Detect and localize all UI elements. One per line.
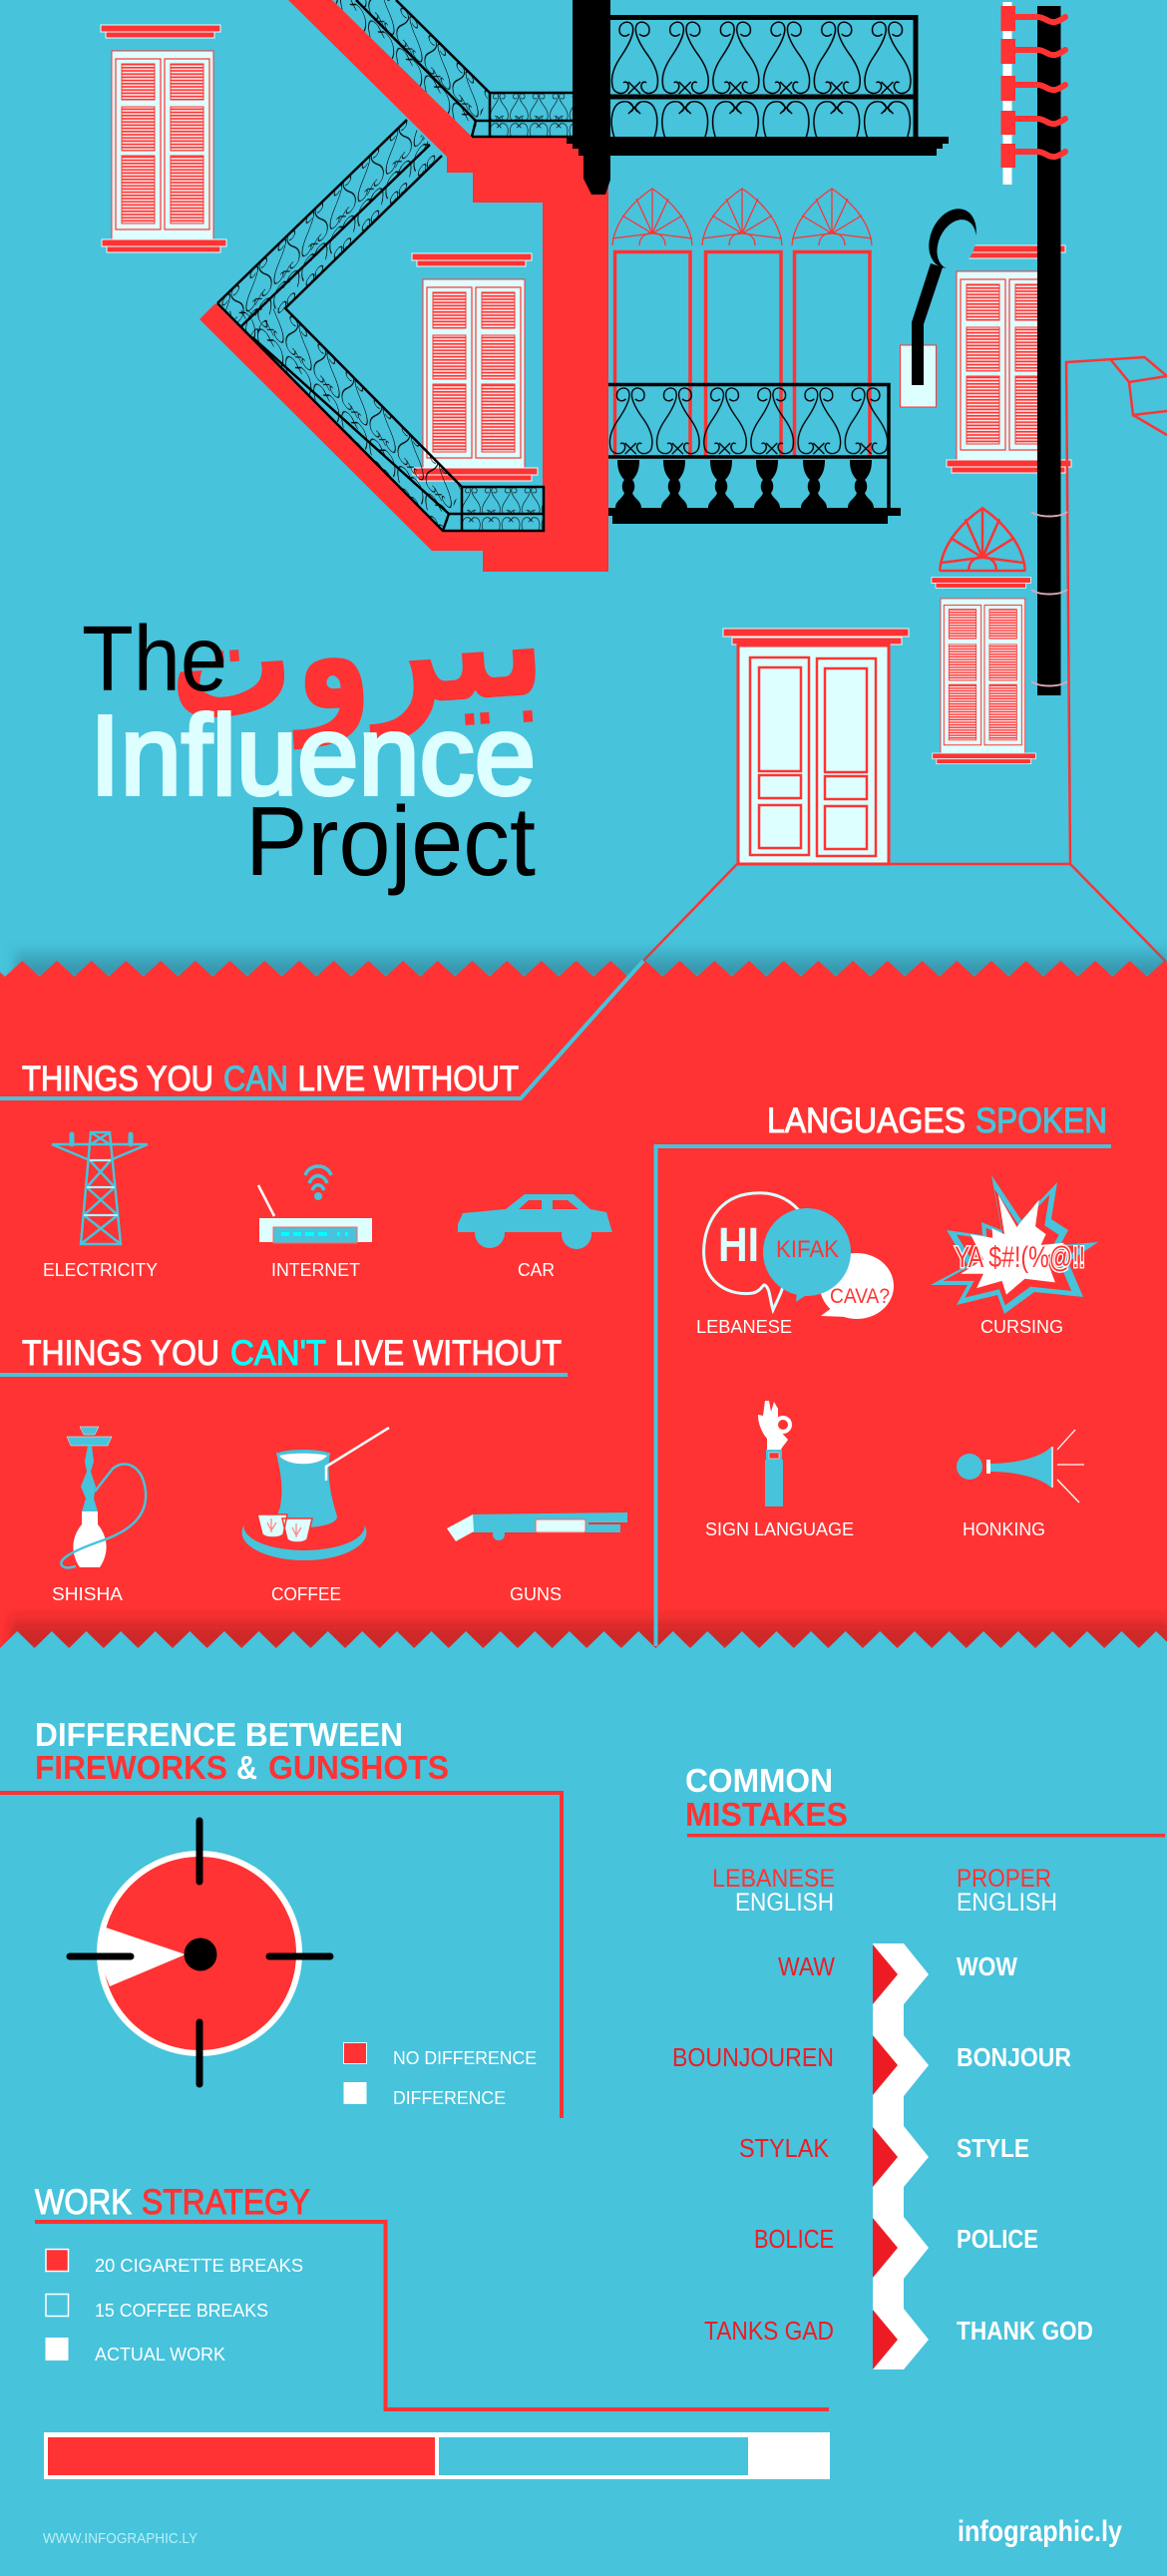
lower balcony bbox=[608, 385, 901, 524]
heading: difference between: & bbox=[236, 1749, 257, 1786]
icon: hand sign bbox=[758, 1401, 790, 1506]
column head: proper english bbox=[957, 1865, 1057, 1917]
arched windows bbox=[612, 189, 872, 457]
title word: The: The bbox=[82, 607, 227, 710]
list: lebanese english words: STYLAK bbox=[739, 2133, 830, 2163]
list: proper english words: STYLE bbox=[957, 2133, 1029, 2163]
icon: shisha bbox=[61, 1427, 146, 1567]
utility pole bbox=[1031, 6, 1067, 695]
legend: coffee breaks: 15 COFFEE BREAKS bbox=[95, 2301, 268, 2321]
label: lebanese: LEBANESE bbox=[696, 1317, 792, 1337]
street perspective lines bbox=[643, 357, 1167, 963]
window: right bbox=[946, 245, 1071, 473]
heading: difference between bbox=[35, 1716, 449, 1786]
label: electricity: ELECTRICITY bbox=[43, 1260, 158, 1280]
list: proper english words: POLICE bbox=[957, 2224, 1038, 2254]
list: lebanese english words: TANKS GAD bbox=[704, 2316, 834, 2346]
icon: coffee pot and cups bbox=[241, 1428, 389, 1560]
street lamp bbox=[900, 202, 985, 407]
label: sign language: SIGN LANGUAGE bbox=[705, 1519, 854, 1539]
heading: things you can live without bbox=[0, 961, 643, 1098]
list: proper english words: WOW bbox=[957, 1951, 1017, 1981]
column head: lebanese english: LEBANESE bbox=[712, 1865, 835, 1893]
window: top left bbox=[101, 25, 226, 252]
label: honking: HONKING bbox=[963, 1519, 1045, 1539]
heading: common mistakes: MISTAKES bbox=[685, 1796, 848, 1833]
heading: things you can live without: THINGS YOU bbox=[22, 1060, 213, 1098]
shadow above lower zigzag bbox=[10, 1609, 1167, 1648]
heading: things you can't live without: CAN'T bbox=[230, 1334, 326, 1373]
legend: cigarette breaks bbox=[46, 2249, 303, 2276]
label: shisha: SHISHA bbox=[52, 1584, 123, 1604]
staircase railings bbox=[217, 0, 573, 531]
icon: speech bubbles: CAVA? bbox=[830, 1285, 890, 1308]
icon: speech bubbles bbox=[704, 1193, 894, 1319]
label: cursing: CURSING bbox=[980, 1317, 1063, 1337]
icon: electricity tower bbox=[52, 1132, 148, 1244]
heading: work strategy: STRATEGY bbox=[142, 2183, 310, 2222]
heading: things you can't live without: LIVE WITHOUT bbox=[335, 1334, 562, 1373]
list: lebanese english words: BOUNJOUREN bbox=[672, 2042, 834, 2072]
list: proper english words: BONJOUR bbox=[957, 2042, 1071, 2072]
icon: shotgun bbox=[447, 1512, 627, 1541]
title word: Project: Project bbox=[245, 786, 536, 896]
title word: Influence: Influence bbox=[90, 692, 536, 818]
legend: actual work: ACTUAL WORK bbox=[95, 2345, 225, 2364]
chevron strip bbox=[873, 1943, 929, 2369]
footer url: WWW.INFOGRAPHIC.LY bbox=[43, 2530, 197, 2547]
panel: common mistakes bbox=[672, 1762, 1165, 2369]
heading: work strategy bbox=[35, 2183, 310, 2222]
window: small with arch bbox=[932, 508, 1035, 764]
heading: things you can't live without: THINGS YOU bbox=[22, 1334, 219, 1373]
heading: things you can't live without bbox=[0, 1334, 568, 1377]
upper balcony bbox=[567, 0, 949, 195]
icon: cursing burst bbox=[931, 1175, 1098, 1314]
panel: red section bbox=[0, 961, 1167, 1660]
door bbox=[723, 629, 909, 864]
heading: languages spoken: LANGUAGES bbox=[767, 1101, 966, 1140]
legend: no difference bbox=[343, 2043, 537, 2068]
icon: speech bubbles: KIFAK bbox=[776, 1236, 839, 1263]
column head: lebanese english: ENGLISH bbox=[735, 1889, 834, 1917]
wall fixtures with red clamps bbox=[1001, 2, 1065, 185]
heading: things you can live without: CAN bbox=[223, 1060, 288, 1098]
label: internet: INTERNET bbox=[271, 1260, 360, 1280]
heading: difference between: DIFFERENCE BETWEEN bbox=[35, 1716, 403, 1753]
footer logo: infographic.ly bbox=[958, 2515, 1122, 2548]
list: lebanese english words: WAW bbox=[778, 1951, 835, 1981]
list: proper english words bbox=[957, 1951, 1093, 2346]
pie chart crosshair bbox=[70, 1821, 330, 2084]
title bbox=[82, 549, 551, 896]
column head: proper english: ENGLISH bbox=[957, 1889, 1057, 1917]
window: middle bbox=[412, 253, 538, 481]
column head: proper english: PROPER bbox=[957, 1865, 1051, 1893]
icon: horn bbox=[957, 1430, 1084, 1503]
label: car: CAR bbox=[518, 1260, 555, 1280]
list: lebanese english words bbox=[672, 1951, 835, 2346]
arabic word Beirut: بيروت bbox=[162, 549, 551, 758]
icon: router bbox=[258, 1166, 372, 1243]
panel: building facade bbox=[101, 0, 1167, 963]
list: lebanese english words: BOLICE bbox=[754, 2224, 834, 2254]
icon: cursing burst: YA $#!(%@!! bbox=[955, 1241, 1085, 1274]
heading: difference between: GUNSHOTS bbox=[268, 1749, 449, 1786]
legend: coffee breaks bbox=[46, 2295, 268, 2321]
heading: languages spoken: SPOKEN bbox=[975, 1101, 1107, 1140]
heading: things you can live without: LIVE WITHOUT bbox=[297, 1060, 519, 1098]
heading: difference between: FIREWORKS bbox=[35, 1749, 227, 1786]
column head: lebanese english bbox=[712, 1865, 835, 1917]
label: guns: GUNS bbox=[510, 1584, 562, 1604]
legend: difference bbox=[343, 2082, 506, 2108]
red wall bbox=[199, 0, 608, 572]
heading: common mistakes bbox=[685, 1762, 848, 1833]
legend: no difference: NO DIFFERENCE bbox=[393, 2048, 537, 2068]
heading: work strategy: WORK bbox=[35, 2183, 132, 2222]
heading: common mistakes: COMMON bbox=[685, 1762, 833, 1799]
legend: actual work bbox=[46, 2338, 225, 2364]
zigzag band shadow top bbox=[15, 943, 1167, 978]
lower zigzag bbox=[0, 1631, 1167, 1649]
list: proper english words: THANK GOD bbox=[957, 2316, 1093, 2346]
panel: fireworks vs gunshots bbox=[0, 1716, 562, 2118]
legend: cigarette breaks: 20 CIGARETTE BREAKS bbox=[95, 2256, 303, 2276]
legend: difference: DIFFERENCE bbox=[393, 2088, 506, 2108]
panel: work strategy bbox=[35, 2183, 830, 2479]
heading: languages spoken bbox=[656, 1101, 1111, 1646]
stacked bar bbox=[44, 2432, 830, 2479]
label: coffee: COFFEE bbox=[271, 1584, 341, 1604]
icon: car bbox=[458, 1194, 612, 1249]
icon: speech bubbles: HI bbox=[718, 1219, 759, 1272]
